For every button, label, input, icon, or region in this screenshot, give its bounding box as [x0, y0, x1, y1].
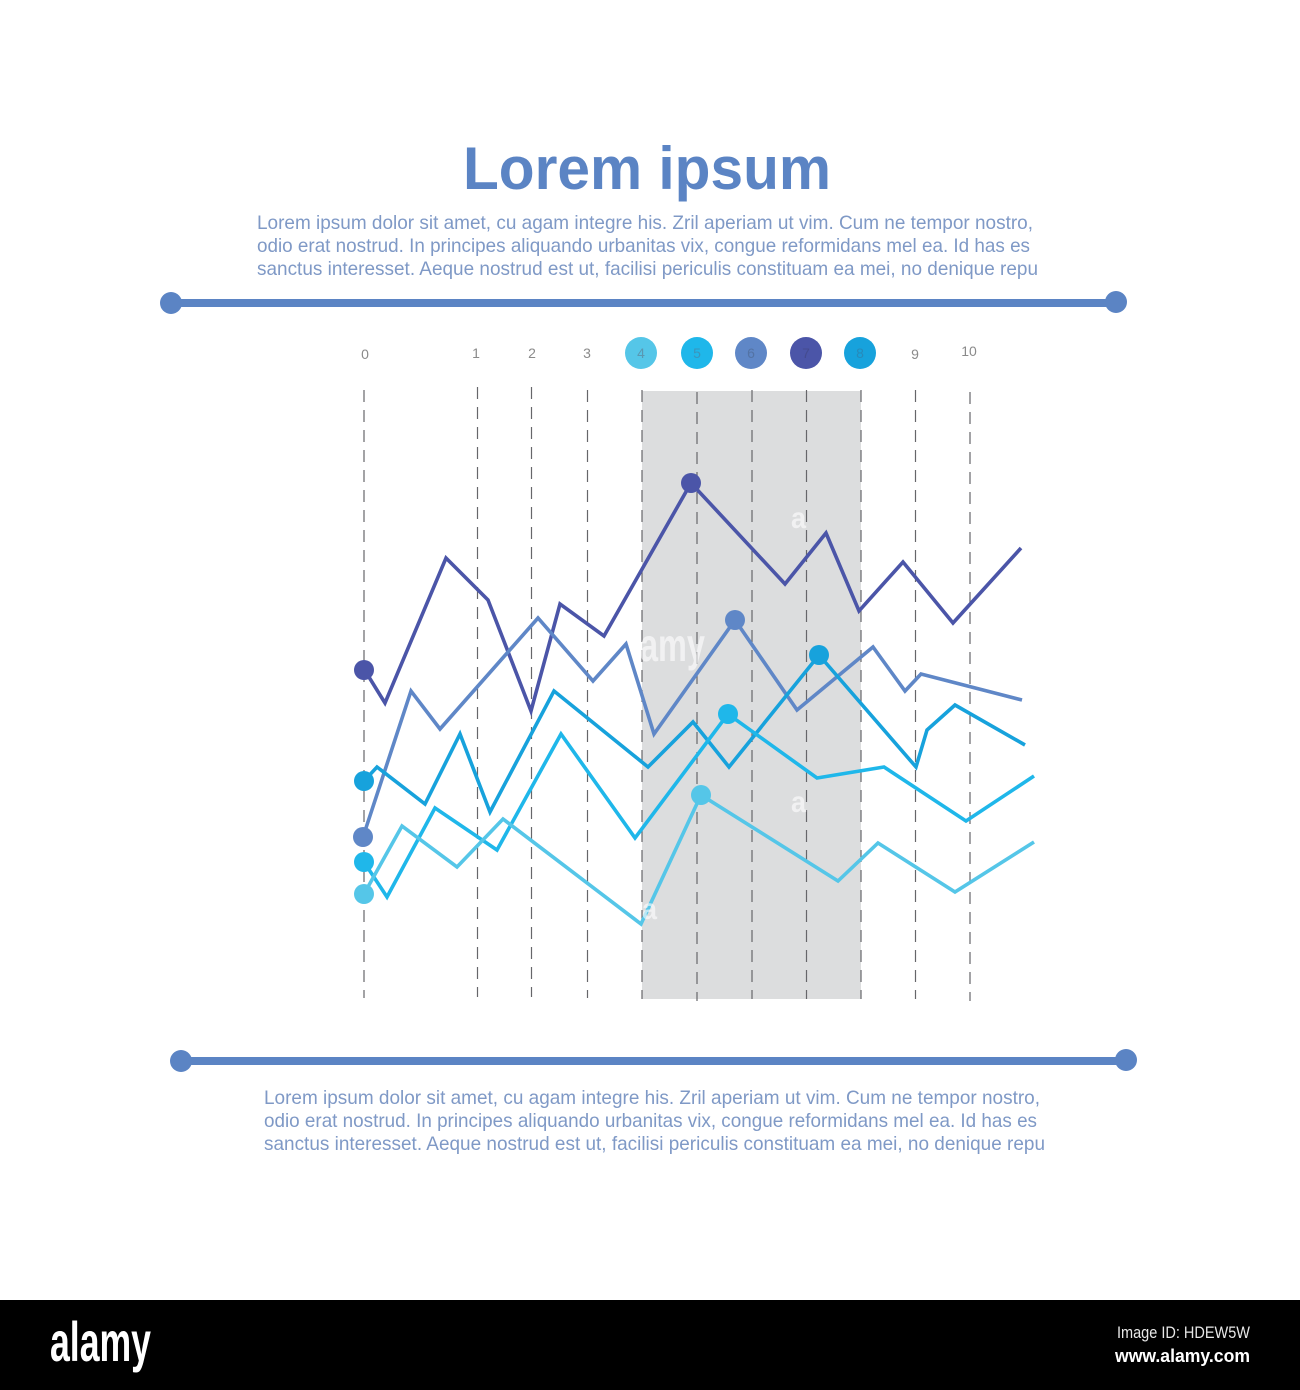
bottom text block — [264, 1087, 1045, 1155]
watermark — [640, 502, 806, 926]
axis labels: 2 — [528, 345, 536, 361]
legend numbers: 6 — [747, 345, 755, 361]
watermark: a — [791, 786, 806, 819]
axis labels: 9 — [911, 346, 919, 362]
footer website: www.alamy.com — [1114, 1346, 1250, 1366]
legend numbers: 8 — [856, 345, 864, 361]
watermark: a — [642, 893, 657, 926]
top text block — [257, 212, 1038, 280]
legend numbers: 5 — [693, 345, 701, 361]
axis labels: 0 — [361, 346, 369, 362]
line: series 5 sky blue — [354, 704, 1034, 897]
watermark: amy — [640, 619, 705, 671]
legend circles — [625, 337, 876, 369]
footer logo: alamy — [50, 1310, 151, 1373]
top text block: Lorem ipsum dolor sit amet, cu agam integre his. Zril aperiam ut vim. Cum ne tempor nostro, — [257, 212, 1033, 234]
axis labels: 3 — [583, 345, 591, 361]
vertical dashed gridlines — [364, 387, 970, 1001]
line: series 7 dark indigo — [354, 473, 1021, 711]
axis labels: 1 — [472, 345, 480, 361]
line: series 8 azure — [354, 645, 1025, 812]
chart — [353, 337, 1034, 1001]
top text block: odio erat nostrud. In principes aliquando urbanitas vix, congue reformidans mel ea. Id has es — [257, 235, 1030, 257]
title: Lorem ipsum — [463, 135, 831, 202]
top divider — [160, 291, 1127, 314]
bottom text block: odio erat nostrud. In principes aliquando urbanitas vix, congue reformidans mel ea. Id has es — [264, 1110, 1037, 1132]
bottom text block: sanctus interesset. Aeque nostrud est ut, facilisi periculis constituam ea mei, no denique repu — [264, 1133, 1045, 1155]
axis labels — [361, 343, 977, 362]
highlighted band — [642, 391, 861, 999]
axis labels: 10 — [961, 343, 977, 359]
line: series 4 light cyan — [354, 785, 1034, 924]
bottom text block: Lorem ipsum dolor sit amet, cu agam integre his. Zril aperiam ut vim. Cum ne tempor nostro, — [264, 1087, 1040, 1109]
legend numbers: 7 — [802, 345, 810, 361]
bottom divider — [170, 1049, 1137, 1072]
legend numbers — [637, 345, 864, 361]
footer image id: Image ID: HDEW5W — [1117, 1323, 1250, 1342]
legend numbers: 4 — [637, 345, 645, 361]
footer bar — [0, 1300, 1300, 1390]
line: series 6 mid blue — [353, 610, 1022, 847]
top text block: sanctus interesset. Aeque nostrud est ut, facilisi periculis constituam ea mei, no denique repu — [257, 258, 1038, 280]
watermark: a — [791, 502, 806, 535]
